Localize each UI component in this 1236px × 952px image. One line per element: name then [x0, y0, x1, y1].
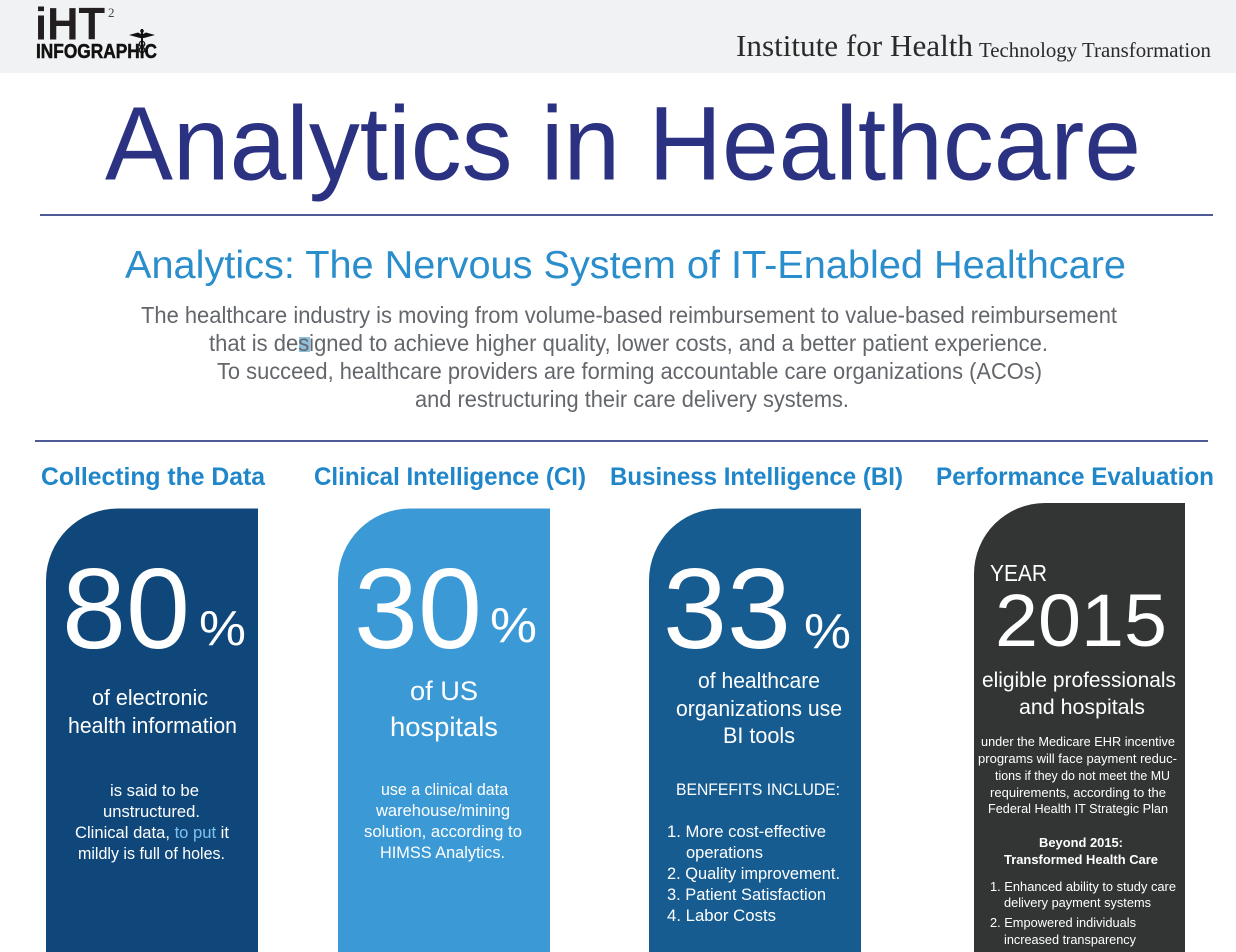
note	[364, 780, 522, 862]
description: of electronic	[92, 685, 208, 710]
benefits list: 1. More cost-effective	[667, 822, 826, 841]
note: under the Medicare EHR incentive	[981, 734, 1175, 749]
intro text block: that is designed to achieve higher quality, lower costs, and a better patient experience.	[209, 330, 1048, 356]
icon: caduceus	[129, 29, 155, 58]
benefits list: 4. Labor Costs	[667, 906, 776, 925]
panel: clinical intelligence	[338, 508, 550, 952]
panel: business intelligence	[649, 508, 861, 952]
beyond 2015 heading: Transformed Health Care	[1004, 852, 1158, 867]
beyond 2015 list: 1. Enhanced ability to study care	[990, 879, 1176, 894]
heading: Collecting the Data: Collecting the Data	[41, 463, 266, 491]
note: solution, according to	[364, 822, 522, 841]
description	[68, 685, 237, 738]
heading: Performance Evaluation: Performance Evaluation	[936, 463, 1214, 491]
stat: 33%: 33	[663, 546, 791, 673]
title: Analytics in Healthcare	[105, 86, 1141, 202]
stat: year 2015: 2015	[995, 579, 1167, 662]
logo: iHT2 Infographic: INFOGRAPHIC	[36, 41, 157, 63]
note: Clinical data, to put it	[75, 823, 229, 842]
beyond 2015 heading: Beyond 2015:	[1039, 835, 1123, 850]
note: HIMSS Analytics.	[380, 843, 505, 862]
description: health information	[68, 713, 237, 738]
stat: 33%: %	[804, 605, 851, 659]
panel: collecting the data	[46, 508, 258, 952]
organisation name: Institute for Health	[736, 28, 973, 63]
description: of healthcare	[698, 668, 820, 693]
description: and hospitals	[1019, 696, 1145, 719]
description: hospitals	[390, 712, 498, 742]
stat: 30%: 30	[354, 546, 482, 673]
stat: 30%: %	[490, 599, 537, 653]
note: warehouse/mining	[375, 801, 510, 820]
beyond 2015 heading	[1004, 835, 1158, 867]
heading: Clinical Intelligence: Clinical Intelligence (CI)	[314, 463, 586, 491]
stat: 80%: 80	[62, 546, 190, 673]
organisation name: Technology Transformation	[979, 38, 1211, 62]
note: is said to be	[110, 781, 199, 800]
note: requirements, according to the	[990, 785, 1166, 800]
description: organizations use	[676, 696, 842, 721]
panel: performance evaluation	[974, 503, 1185, 952]
note: Federal Health IT Strategic Plan	[988, 801, 1168, 816]
intro text block: and restructuring their care delivery systems.	[415, 386, 849, 412]
description	[676, 668, 842, 748]
note: use a clinical data	[381, 780, 509, 799]
description	[390, 676, 498, 742]
beyond 2015 list: increased transparency	[1004, 932, 1136, 947]
beyond 2015 list: 2. Empowered individuals	[990, 915, 1136, 930]
stat: 30%	[354, 546, 537, 673]
stat: 80%	[62, 546, 246, 673]
description	[982, 669, 1176, 719]
organisation name	[736, 28, 1211, 63]
description: eligible professionals	[982, 669, 1176, 692]
note	[978, 734, 1177, 816]
logo: iHT2 Infographic	[35, 0, 157, 63]
stat: year 2015: YEAR	[990, 560, 1047, 586]
note: programs will face payment reduc-	[978, 751, 1177, 766]
note: mildly is full of holes.	[78, 844, 225, 863]
stat: 33%	[663, 546, 851, 673]
beyond 2015 list	[990, 879, 1176, 947]
intro text block: The healthcare industry is moving from volume-based reimbursement to value-based reimbursement	[141, 302, 1118, 328]
benefits list: 2. Quality improvement.	[667, 864, 840, 883]
intro text block	[141, 302, 1118, 412]
note	[75, 781, 229, 863]
benefits list: operations	[686, 843, 763, 862]
stat: 80%: %	[199, 602, 246, 656]
logo: iHT2 Infographic: iHT	[35, 0, 105, 50]
description: BI tools	[723, 723, 795, 748]
beyond 2015 list: delivery payment systems	[1004, 895, 1151, 910]
description: of US	[410, 676, 478, 706]
benefits list: 3. Patient Satisfaction	[667, 885, 826, 904]
note: tions if they do not meet the MU	[995, 768, 1170, 783]
subtitle: Analytics: The Nervous System of IT-Enabled Healthcare	[125, 244, 1126, 287]
note: unstructured.	[103, 802, 200, 821]
heading: Business Intelligence: Business Intelligence (BI)	[610, 463, 903, 491]
benefits list: BENFEFITS INCLUDE:	[676, 780, 840, 799]
intro text block: To succeed, healthcare providers are forming accountable care organizations (ACOs)	[217, 358, 1042, 384]
header bar	[0, 0, 1236, 73]
benefits list	[667, 780, 840, 925]
logo: iHT2 Infographic: 2	[108, 5, 114, 20]
